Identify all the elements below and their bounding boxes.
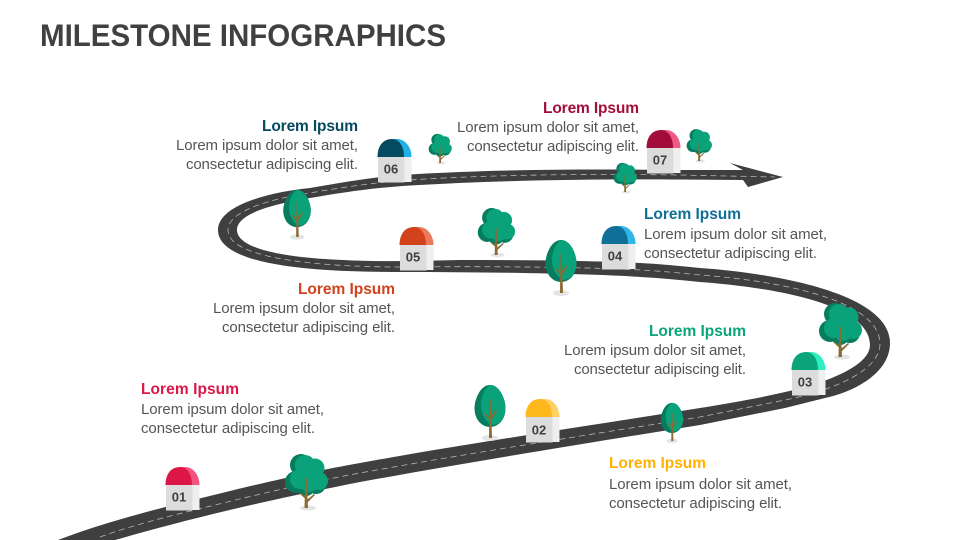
text block 05: Lorem ipsum dolor sit amet, <box>213 300 395 317</box>
text block 04 <box>644 206 827 262</box>
text block 05 <box>213 281 395 336</box>
text block 06: Lorem Ipsum <box>262 118 358 135</box>
text block 06: Lorem ipsum dolor sit amet, <box>176 137 358 154</box>
milestone marker 02: 02 <box>532 422 546 438</box>
tree: small round, near milestone 06 <box>429 134 452 164</box>
text block 06 <box>176 118 358 173</box>
text block 02: consectetur adipiscing elit. <box>609 495 782 512</box>
tree: round, above middle road <box>478 208 515 257</box>
tree: round, beside milestone 01 <box>285 454 328 510</box>
milestone marker 03: 03 <box>798 374 812 390</box>
text block 01: consectetur adipiscing elit. <box>141 420 315 437</box>
milestone marker 03 <box>792 352 826 396</box>
text block 02 <box>609 455 792 512</box>
text block 07: Lorem Ipsum <box>543 100 639 117</box>
milestone marker 07: 07 <box>653 152 667 168</box>
tree: small oval, on lower road <box>661 403 683 443</box>
text block 01 <box>141 381 324 437</box>
milestone marker 04 <box>602 226 636 270</box>
text block 03: Lorem ipsum dolor sit amet, <box>564 342 746 359</box>
text block 06: consectetur adipiscing elit. <box>186 156 358 173</box>
text block 01: Lorem ipsum dolor sit amet, <box>141 401 324 418</box>
milestone marker 07 <box>646 130 680 174</box>
text block 07: consectetur adipiscing elit. <box>467 138 639 155</box>
text block 05: consectetur adipiscing elit. <box>222 319 395 336</box>
milestone marker 05: 05 <box>406 250 420 264</box>
milestone marker 06: 06 <box>384 162 398 176</box>
winding road with arrow <box>58 163 890 540</box>
text block 03 <box>564 323 746 378</box>
milestone marker 06 <box>378 139 412 182</box>
text block 01: Lorem Ipsum <box>141 381 239 398</box>
tree: small round, right of milestone 07 <box>687 129 712 162</box>
tree: oval, inside left bend <box>283 190 311 240</box>
tree: oval, left of milestone 02 <box>474 385 506 441</box>
text block 05: Lorem Ipsum <box>298 281 395 298</box>
text block 02: Lorem Ipsum <box>609 455 706 472</box>
tree: small round, on top road <box>614 163 637 193</box>
text block 03: Lorem Ipsum <box>649 323 746 340</box>
milestone marker 02 <box>526 399 560 442</box>
text block 04: consectetur adipiscing elit. <box>644 245 817 262</box>
milestone marker 01 <box>166 467 200 510</box>
text block 02: Lorem ipsum dolor sit amet, <box>609 476 792 493</box>
milestone marker 01: 01 <box>172 490 186 504</box>
milestone marker 04: 04 <box>608 248 623 264</box>
text block 04: Lorem ipsum dolor sit amet, <box>644 226 827 243</box>
text block 04: Lorem Ipsum <box>644 206 741 223</box>
milestone marker 05 <box>400 227 434 270</box>
text block 03: consectetur adipiscing elit. <box>574 361 746 378</box>
tree: oval, on middle road <box>546 240 576 296</box>
title: MILESTONE INFOGRAPHICS <box>40 17 446 53</box>
text block 07 <box>457 100 639 155</box>
tree: round, inside right bend <box>819 303 862 360</box>
text block 07: Lorem ipsum dolor sit amet, <box>457 119 639 136</box>
